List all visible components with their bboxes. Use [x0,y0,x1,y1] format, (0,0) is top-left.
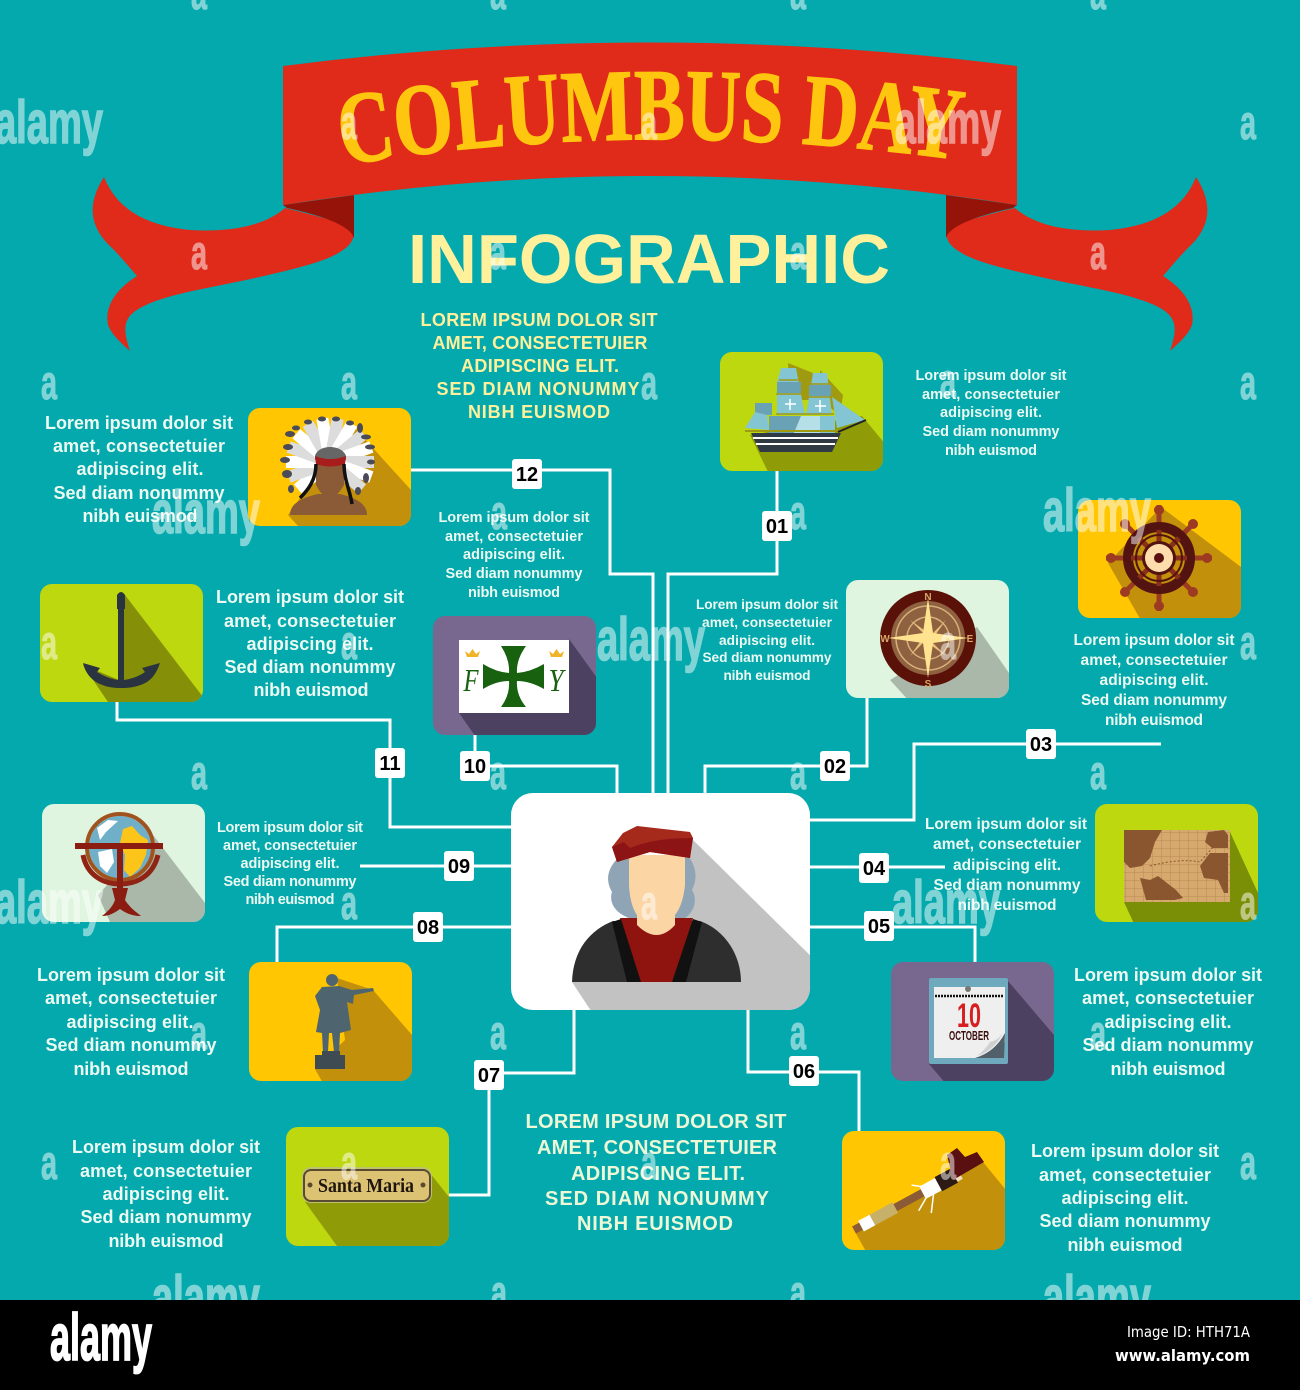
text block: top centre [420,310,658,422]
text block: item 12: adipiscing elit. [76,459,204,479]
text block: item 07 [72,1137,260,1251]
watermark: alamy words: alamy [152,1264,260,1331]
number badges: 04 [863,858,886,880]
footer logo: alamy [50,1300,152,1374]
text block: item 11: adipiscing elit. [246,634,374,654]
text block: top centre: NIBH EUISMOD [468,402,610,422]
watermark: alamy words: alamy [1043,1264,1151,1331]
watermark: alamy words: alamy [892,869,1000,936]
watermark: small letters: a [940,355,956,408]
icon: Santa Maria nameplate [302,1167,432,1203]
text block: item 01: amet, consectetuier [922,387,1060,403]
icon: anchor [83,592,160,688]
text block: item 04 [925,816,1087,914]
text block: item 09: Sed diam nonummy [224,874,356,890]
watermark: small letters: a [641,877,657,930]
text block: item 06: amet, consectetuier [1039,1165,1211,1185]
text block: item 05 [1074,965,1262,1079]
text block: bottom centre: AMET, CONSECTETUIER [537,1137,778,1159]
text block: item 03: nibh euismod [1105,712,1203,729]
text block: bottom centre: LOREM IPSUM DOLOR SIT [526,1111,786,1133]
watermark: small letters: a [341,1137,357,1190]
icon: compass rose: N [924,592,932,603]
number badges: 05 [868,916,890,938]
icon: compass rose: E [967,634,974,645]
panel: 07 Santa Maria [286,1127,449,1246]
panel: 03 ship wheel [1078,500,1245,622]
text block: item 07: nibh euismod [108,1231,224,1251]
watermark: small letters: a [1240,877,1256,930]
ribbon folds [283,195,1017,238]
panel: 08 statue [249,962,412,1085]
text block: item 09 [217,820,363,908]
number badges: 07 [478,1065,500,1087]
text block: item 10: amet, consectetuier [445,529,583,545]
text block: item 12: amet, consectetuier [53,436,225,456]
right ribbon tail [946,177,1207,351]
watermark: small letters: a [341,97,357,150]
watermark: small letters: a [790,747,806,800]
number badges: 09 [448,856,470,878]
text block: item 06: Lorem ipsum dolor sit [1031,1141,1219,1161]
text block: item 09: Lorem ipsum dolor sit [217,820,363,836]
number badges: 06 [793,1061,815,1083]
panel: 01 ship [720,352,883,471]
text block: item 12: Lorem ipsum dolor sit [45,413,233,433]
icon: peace pipe [848,1148,984,1249]
panel: 09 globe [42,804,205,922]
text block: bottom centre [526,1111,786,1235]
text block: item 10: adipiscing elit. [463,547,565,563]
icon: green cross flag [459,640,569,713]
text block: item 03: amet, consectetuier [1080,652,1228,669]
watermark: alamy words: alamy [0,869,103,936]
text block: item 02: Lorem ipsum dolor sit [696,597,838,612]
watermark: small letters: a [641,357,657,410]
text block: item 06: nibh euismod [1068,1235,1182,1255]
text block: item 02: Sed diam nonummy [702,650,832,665]
panel: 10 flag [433,616,600,740]
icon: compass rose [880,590,976,690]
text block: item 11: Sed diam nonummy [224,657,396,677]
icon: sailing ship [745,363,866,452]
watermark: small letters: a [341,617,357,670]
watermark: small letters: a [1240,1137,1256,1190]
text block: item 02: nibh euismod [724,668,810,683]
watermark: small letters: a [1090,227,1106,280]
text block: item 09: amet, consectetuier [223,838,357,854]
text block: item 01 [916,368,1067,459]
watermark: small letters: a [341,877,357,930]
number badges: 08 [417,917,439,939]
watermark: small letters: a [940,617,956,670]
text block: item 08: amet, consectetuier [45,988,217,1008]
watermark: small letters: a [491,487,507,540]
watermark: alamy words: alamy [597,606,705,673]
watermark: small letters: a [940,1137,956,1190]
panel: 04 map [1095,804,1258,926]
text block: item 02: amet, consectetuier [702,615,833,630]
icon: calendar 10 October [929,978,1008,1064]
text block: item 02 [696,597,838,683]
watermark: small letters: a [790,487,806,540]
watermark: alamy words [0,89,1151,1331]
text block: item 05: Lorem ipsum dolor sit [1074,965,1262,985]
text block: item 12 [45,413,233,526]
banner ribbon [93,42,1207,351]
text block: item 08 [37,965,225,1079]
footer bar [0,1300,1300,1390]
text block: item 10: nibh euismod [468,585,560,601]
text block: item 03: Sed diam nonummy [1081,692,1227,709]
text block: item 05: adipiscing elit. [1104,1012,1232,1032]
icon: desk globe [75,814,163,916]
text block: item 04: adipiscing elit. [953,857,1061,874]
icon: feather headdress chief [280,416,375,515]
heading: Infographic: INFOGRAPHIC [408,220,890,298]
text block: item 07: Sed diam nonummy [80,1207,252,1227]
text block: item 04: nibh euismod [958,897,1056,914]
text block: item 03: adipiscing elit. [1100,672,1208,689]
text block: item 01: Lorem ipsum dolor sit [916,368,1067,384]
text block: item 12: nibh euismod [82,506,198,526]
text block: item 05: nibh euismod [1110,1059,1226,1079]
watermark: small letters: a [41,1137,57,1190]
watermark: small letters: a [41,617,57,670]
text block: item 02: adipiscing elit. [719,633,815,648]
text block: item 10 [438,510,590,601]
footer url: www.alamy.com [1115,1346,1250,1365]
text block: item 07: amet, consectetuier [80,1161,252,1181]
text block: item 01: adipiscing elit. [940,405,1042,421]
ribbon main band [283,42,1017,205]
watermark: small letters: a [1240,357,1256,410]
text block: item 04: Lorem ipsum dolor sit [925,816,1087,833]
number badges: 02 [824,756,846,778]
text block: item 01: Sed diam nonummy [922,424,1060,440]
number badges: 03 [1030,734,1052,756]
text block: item 11 [216,587,404,700]
watermark: small letters: a [490,747,506,800]
icon: world route map [1124,830,1230,902]
text block: item 08: nibh euismod [74,1059,188,1079]
panel: 11 anchor [40,584,203,702]
watermark: small letters: a [790,227,806,280]
icon: calendar 10 October: 10 [957,997,981,1035]
watermark: small letters: a [341,357,357,410]
text block: item 09: nibh euismod [246,892,334,908]
text block: item 06: adipiscing elit. [1062,1188,1188,1208]
watermark: alamy words: alamy [1043,477,1151,544]
text block: bottom centre: SED DIAM NONUMMY [545,1188,770,1210]
watermark: small letters: a [191,227,207,280]
icon: compass rose: W [880,634,890,645]
panel: 02 compass [846,580,1009,702]
icon: Columbus statue [315,974,374,1069]
watermark: small letters: a [641,1137,657,1190]
panel: centre portrait [511,793,810,1010]
icon: calendar 10 October: OCTOBER [949,1028,989,1043]
text block: bottom centre: ADIPISCING ELIT. [571,1163,745,1185]
watermark: small letters: a [191,747,207,800]
number badges: 01 [766,516,788,538]
text block: bottom centre: NIBH EUISMOD [577,1213,733,1235]
watermark: small letters: a [490,1007,506,1060]
text block: item 03: Lorem ipsum dolor sit [1074,632,1234,649]
text block: item 04: amet, consectetuier [933,836,1081,853]
watermark: alamy words: alamy [895,89,1001,156]
text block: item 10: Lorem ipsum dolor sit [438,510,590,526]
watermark: small letters: a [790,1007,806,1060]
watermark: small letters: a [1240,97,1256,150]
icon: green cross flag: Y [548,662,566,698]
title: Columbus Day: COLUMBUS DAY [340,72,966,162]
text block: item 11: nibh euismod [254,680,368,700]
text block: item 12: Sed diam nonummy [54,483,224,503]
text block: item 11: Lorem ipsum dolor sit [216,587,404,607]
footer image id: Image ID: HTH71A [1127,1323,1251,1341]
text block: top centre: LOREM IPSUM DOLOR SIT [420,310,658,330]
text block: item 08: Sed diam nonummy [46,1035,216,1055]
number badges: 10 [464,756,486,778]
text block: top centre: AMET, CONSECTETUIER [432,333,648,353]
text block: item 06 [1031,1141,1219,1255]
text block: item 07: Lorem ipsum dolor sit [72,1137,260,1157]
number badges: 11 [379,753,401,775]
text block: item 08: adipiscing elit. [66,1012,194,1032]
watermark: small letters: a [41,357,57,410]
text block: item 07: adipiscing elit. [102,1184,230,1204]
text block: item 08: Lorem ipsum dolor sit [37,965,225,985]
watermark: small letters: a [490,227,506,280]
icon: green cross flag: F [463,662,479,698]
watermark: small letters: a [1240,617,1256,670]
watermark: small letters: a [191,1007,207,1060]
panel: 12 native chief [248,408,411,526]
text block: item 05: Sed diam nonummy [1082,1035,1254,1055]
watermark: alamy words: alamy [0,89,103,156]
text block: top centre: ADIPISCING ELIT. [461,356,619,376]
text block: item 11: amet, consectetuier [224,611,396,631]
number badges [375,459,1056,1090]
text block: item 06: Sed diam nonummy [1040,1211,1210,1231]
watermark: small letters: a [1090,1007,1106,1060]
text block: item 03 [1074,632,1234,729]
watermark: small letters: a [491,1267,507,1320]
number badges: 12 [516,464,538,486]
left ribbon tail [93,177,354,351]
text block: item 05: amet, consectetuier [1082,988,1254,1008]
text block: item 10: Sed diam nonummy [446,566,582,582]
panel: 06 peace pipe [842,1131,1010,1255]
text block: top centre: SED DIAM NONUMMY [436,379,640,399]
watermark: small letters: a [790,1267,806,1320]
watermark: alamy words: alamy [152,479,260,546]
icon: Columbus portrait [572,826,741,982]
text block: item 01: nibh euismod [945,443,1037,459]
icon: ship wheel [1106,505,1212,611]
text block: item 04: Sed diam nonummy [934,877,1081,894]
connector lines [117,470,1161,1195]
text block: item 09: adipiscing elit. [240,856,340,872]
watermark: small letters: a [641,97,657,150]
watermark: small letters: a [1090,747,1106,800]
icon: Santa Maria nameplate: Santa Maria [318,1175,414,1197]
panel: 05 calendar [891,962,1054,1085]
icon: compass rose: S [925,679,932,690]
